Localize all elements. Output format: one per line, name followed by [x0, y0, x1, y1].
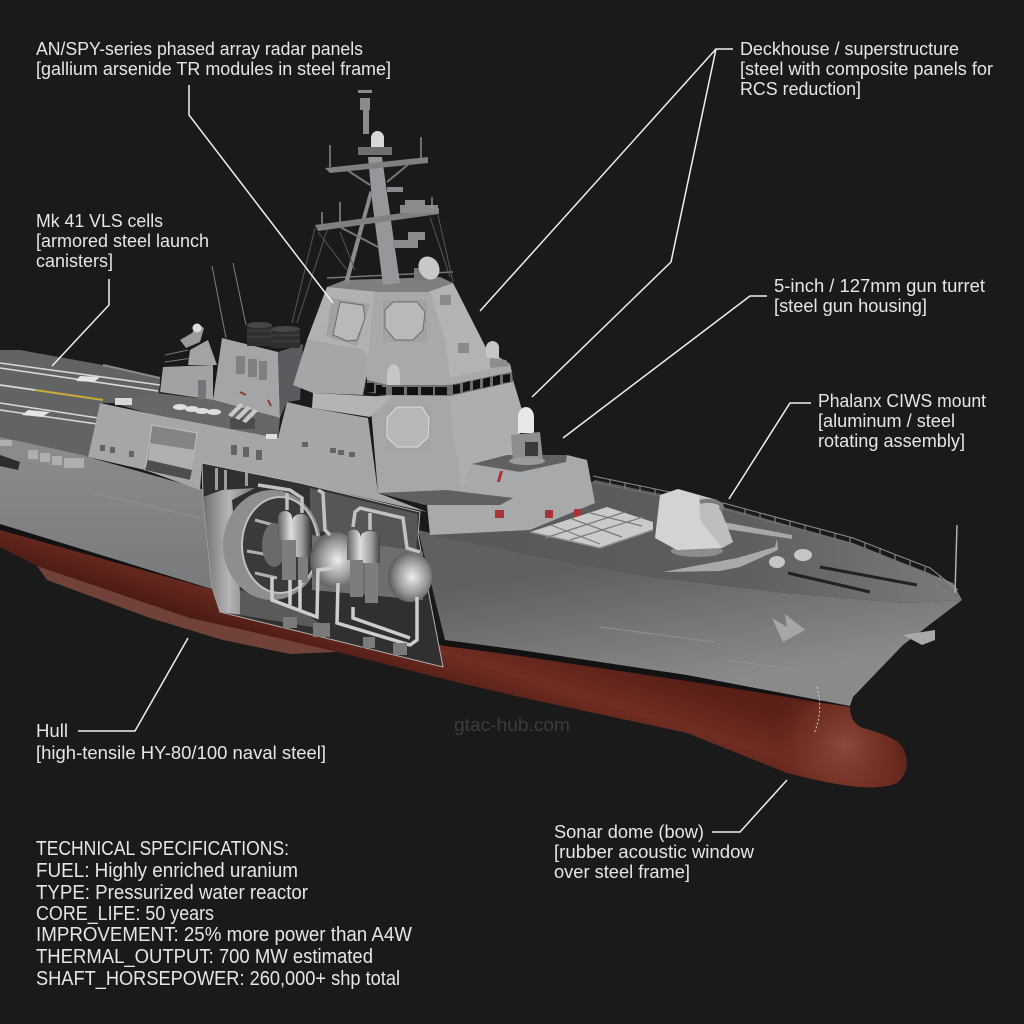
label: deckhouse: [steel with composite panels for [740, 58, 993, 79]
leader line: deckhouse [480, 49, 733, 397]
deck railing [593, 476, 958, 596]
label: gun turret: [steel gun housing] [774, 295, 927, 316]
technical specifications: SHAFT_HORSEPOWER: 260,000+ shp total [36, 968, 400, 990]
technical specifications: IMPROVEMENT: 25% more power than A4W [36, 924, 412, 946]
CIWS base [427, 455, 595, 535]
domes on tower [387, 295, 510, 385]
stern deckhouse [160, 350, 213, 402]
VLS deck grid [530, 507, 653, 548]
label: deckhouse: Deckhouse / superstructure [740, 38, 959, 59]
leader line: radar [189, 85, 333, 303]
reactor pressure vessel [312, 535, 423, 600]
catwalk with rafts [0, 437, 87, 470]
breakwater [663, 539, 778, 572]
label: hull: [high-tensile HY-80/100 naval steel] [36, 742, 326, 763]
steam generator 1 [278, 511, 310, 557]
antennas aft [212, 263, 246, 338]
hangar door [145, 425, 197, 480]
radar dish [414, 253, 444, 283]
black boot-top stripe [0, 520, 853, 707]
upper tower [307, 272, 512, 385]
ledge [312, 393, 390, 417]
bridge windows [367, 372, 513, 396]
CIWS deck top [472, 455, 567, 472]
label: Phalanx [818, 390, 986, 451]
red hatch markers [495, 471, 582, 518]
technical specifications: FUEL: Highly enriched uranium [36, 860, 298, 882]
radar panel 1 [326, 298, 370, 346]
anchor [772, 614, 805, 642]
jackstaff [955, 525, 957, 593]
label: Phalanx: [aluminum / steel [818, 410, 955, 431]
label: gun turret: 5-inch / 127mm gun turret [774, 275, 985, 296]
support pedestals [283, 617, 407, 655]
leader line: Phalanx [729, 403, 811, 499]
capstans and chains [769, 549, 917, 592]
hull recess [0, 455, 20, 470]
label: Mk 41 VLS: [armored steel launch [36, 230, 209, 251]
gun turret [655, 489, 792, 557]
label: hull: Hull [36, 720, 68, 741]
small hatch windows [100, 442, 355, 460]
funnels [247, 322, 300, 348]
flight deck [0, 350, 160, 457]
gallery walkway [378, 490, 513, 505]
armor frame [203, 488, 255, 615]
leader line: VLS [52, 279, 109, 366]
ship illustration [0, 90, 962, 787]
radar panel 3 [385, 405, 431, 450]
watermark: gtac-hub.com [454, 714, 570, 735]
machinery back wall [310, 488, 418, 560]
draft marks [814, 687, 820, 734]
technical specifications: TYPE: Pressurized water reactor [36, 882, 308, 904]
technical specifications: CORE_LIFE: 50 years [36, 903, 214, 925]
label: Mk 41 VLS [36, 210, 209, 271]
main tower lower [370, 380, 525, 493]
aft Phalanx mount [180, 324, 217, 365]
terrace deck with launchers [113, 393, 280, 439]
side block [293, 340, 367, 395]
leader line: hull [78, 638, 188, 731]
leader line: sonar [712, 780, 787, 832]
reactor vessel ring [223, 490, 321, 600]
technical specifications [36, 838, 412, 990]
red lower hull and sonar dome [0, 526, 907, 787]
bow fairlead [903, 630, 935, 645]
bilge keel strip [37, 566, 337, 654]
steam generator 2 [347, 530, 380, 563]
label: Mk 41 VLS: Mk 41 VLS cells [36, 210, 163, 231]
label: sonar dome: Sonar dome (bow) [554, 821, 704, 842]
label: hull [36, 720, 326, 763]
label: sonar dome [554, 821, 755, 882]
label: sonar dome: over steel frame] [554, 861, 690, 882]
label: phased array radar [36, 38, 391, 79]
bow deck [430, 480, 962, 603]
mast [292, 90, 453, 323]
technical specifications: TECHNICAL SPECIFICATIONS: [36, 838, 289, 860]
pipes [258, 485, 420, 552]
aft deckhouse [213, 338, 303, 418]
midship superstructure [88, 402, 427, 512]
hull plating seams [90, 492, 800, 670]
tower right facet [448, 380, 525, 493]
reactor cutaway compartment [202, 463, 443, 667]
leader line: gun [563, 296, 767, 438]
label: phased array radar: AN/SPY-series phased array radar panels [36, 38, 363, 59]
label: deckhouse [740, 38, 993, 99]
CIWS dome mount [509, 407, 545, 465]
label: deckhouse: RCS reduction] [740, 78, 861, 99]
label: Phalanx: rotating assembly] [818, 430, 965, 451]
bow hull side [418, 530, 962, 706]
label: phased array radar: [gallium arsenide TR modules in steel frame] [36, 58, 391, 79]
label: Mk 41 VLS: canisters] [36, 250, 113, 271]
label: Phalanx: Phalanx CIWS mount [818, 390, 986, 411]
pedestal shadow [240, 590, 330, 630]
label: sonar dome: [rubber acoustic window [554, 841, 755, 862]
technical specifications: THERMAL_OUTPUT: 700 MW estimated [36, 946, 373, 968]
radar panel 2 [383, 300, 427, 342]
label: gun turret [774, 275, 985, 316]
aft hull side [0, 445, 215, 590]
upper bars [215, 468, 248, 490]
